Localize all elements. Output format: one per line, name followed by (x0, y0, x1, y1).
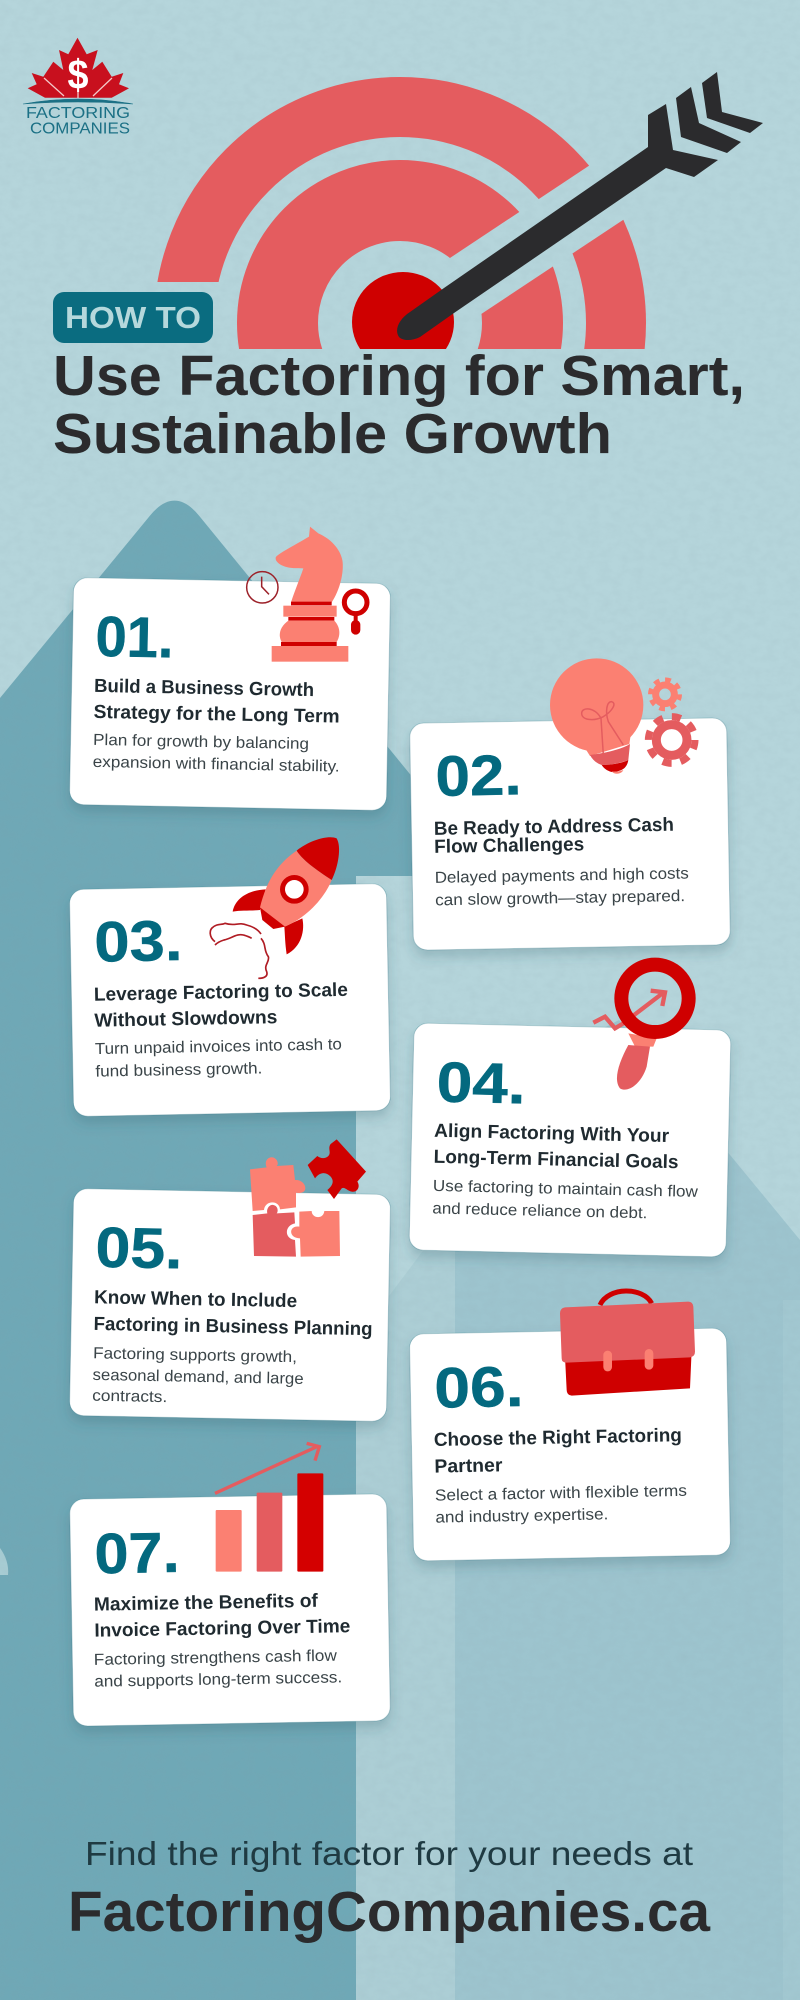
icon: rocket with smoke (210, 837, 339, 978)
card 2 content: Delayed payments and high costs (435, 865, 689, 887)
icon: magnifier with growth arrow (593, 965, 689, 1090)
footer call to action: FactoringCompanies.ca (68, 1880, 711, 1944)
card 7 content: 07. (94, 1521, 180, 1586)
card 1 content: 01. (95, 605, 174, 670)
title: Use Factoring for Smart, (53, 344, 745, 408)
card 6 content: Partner (434, 1455, 503, 1478)
card 6 content: and industry expertise. (435, 1506, 609, 1527)
card 7 content (70, 1494, 390, 1726)
card 1 content (69, 577, 391, 811)
card 2 content: Be Ready to Address Cash (434, 815, 674, 840)
panel: step 5 (69, 1139, 391, 1422)
card 2 content: can slow growth—stay prepared. (435, 888, 685, 909)
logo (23, 38, 133, 138)
target graphic with arrow (158, 72, 763, 349)
icon: maple leaf (28, 38, 129, 98)
card 6 content (409, 1328, 731, 1561)
card 5 content: seasonal demand, and large (92, 1367, 304, 1388)
card 3 content: Turn unpaid invoices into cash to (95, 1036, 342, 1058)
footer call to action (68, 1835, 711, 1944)
target bullseye (352, 272, 454, 349)
icon: light bulb and gears (550, 658, 695, 774)
card 7 content: and supports long-term success. (94, 1669, 342, 1691)
card 7 content: Maximize the Benefits of (94, 1591, 319, 1616)
card 5 content: contracts. (92, 1388, 167, 1406)
panel: step 6 (409, 1291, 731, 1561)
panel: step 3 (69, 837, 391, 1117)
title: Sustainable Growth (53, 402, 612, 466)
arrow (397, 72, 763, 340)
dollar sign: $ (68, 51, 88, 98)
HOW TO badge (53, 292, 213, 343)
card 3 content: fund business growth. (95, 1060, 262, 1081)
card 5 content: Factoring in Business Planning (93, 1314, 373, 1340)
card 5 content: Know When to Include (94, 1287, 297, 1312)
target rings cut along the arrow (158, 77, 646, 349)
card 4 content (409, 1023, 731, 1257)
footer call to action: Find the right factor for your needs at (85, 1835, 693, 1872)
panel: step 1 (69, 527, 391, 811)
card 2 content: 02. (435, 743, 522, 809)
leaf veins (44, 78, 112, 98)
card 6 content: Select a factor with flexible terms (435, 1483, 687, 1505)
icon: briefcase (560, 1291, 695, 1396)
card 5 content: 05. (95, 1216, 183, 1281)
card 5 content: Factoring supports growth, (93, 1345, 297, 1366)
card 4 content: Use factoring to maintain cash flow (433, 1178, 699, 1201)
card 7 content: Invoice Factoring Over Time (94, 1616, 350, 1642)
card 1 content: Build a Business Growth (94, 676, 314, 701)
card 6 content: 06. (434, 1355, 524, 1421)
card 3 content: Without Slowdowns (94, 1007, 278, 1032)
card 7 content: Factoring strengthens cash flow (94, 1648, 337, 1669)
card 4 content: and reduce reliance on debt. (432, 1200, 648, 1222)
icon: chess knight, clock and magnifier (247, 527, 367, 662)
icon: rising bar chart with arrow (215, 1443, 323, 1572)
title (53, 344, 745, 466)
card 2 content (410, 718, 730, 950)
card 5 content (69, 1188, 391, 1422)
logo: COMPANIES (30, 120, 130, 138)
card 3 content (69, 883, 391, 1117)
card 3 content: 03. (94, 909, 183, 975)
logo swoosh (23, 99, 133, 104)
panel: step 2 (410, 658, 730, 950)
card 4 content: Align Factoring With Your (434, 1121, 670, 1147)
card 6 content: Choose the Right Factoring (434, 1425, 682, 1451)
card 3 content: Leverage Factoring to Scale (94, 980, 348, 1006)
card 1 content: Strategy for the Long Term (93, 702, 340, 728)
icon: puzzle pieces (250, 1139, 366, 1257)
card 1 content: Plan for growth by balancing (93, 732, 309, 753)
card 4 content: Long-Term Financial Goals (433, 1147, 679, 1173)
logo wordmark: FACTORING (26, 105, 130, 122)
card 2 content: Flow Challenges (434, 834, 584, 858)
panel: step 4 (409, 965, 731, 1257)
HOW TO badge: HOW TO (65, 300, 201, 335)
card 1 content: expansion with financial stability. (92, 754, 340, 776)
card 4 content: 04. (436, 1050, 526, 1116)
panel: step 7 (70, 1443, 390, 1726)
